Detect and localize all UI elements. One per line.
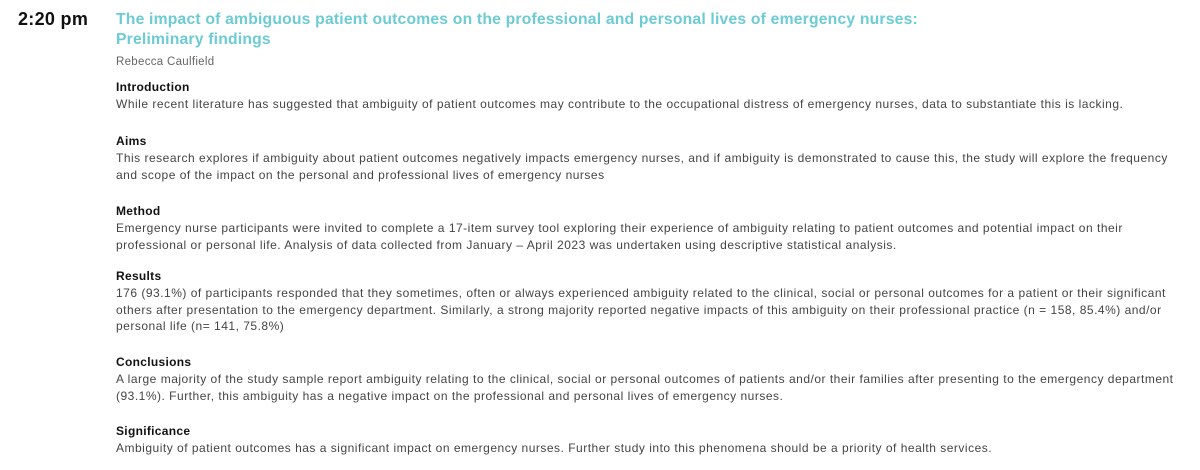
title: Preliminary findings bbox=[116, 31, 271, 48]
section: aims: Aims bbox=[116, 134, 147, 148]
section: conclusions: Conclusions bbox=[116, 355, 191, 369]
section: method: professional or personal life. Analysis of data collected from January – April 2023 was undertaken using descriptive statistical analysis. bbox=[116, 238, 897, 252]
section: method bbox=[116, 204, 1123, 252]
section: conclusions bbox=[116, 355, 1174, 403]
section: aims: and scope of the impact on the personal and professional lives of emergency nurses bbox=[116, 168, 605, 182]
section: introduction: Introduction bbox=[116, 80, 190, 94]
title bbox=[116, 11, 918, 48]
section: results: others after presentation to the emergency department. Similarly, a strong majority reported negative impacts of this ambiguity on their professional practice (n = 158, 85.4%) and/or bbox=[116, 303, 1162, 317]
section: introduction bbox=[116, 80, 1123, 111]
title: The impact of ambiguous patient outcomes on the professional and personal lives of emergency nurses: bbox=[116, 11, 918, 28]
author: Rebecca Caulfield bbox=[116, 56, 214, 68]
section: results: personal life (n= 141, 75.8%) bbox=[116, 319, 284, 333]
section: significance: Significance bbox=[116, 424, 190, 438]
section: conclusions: A large majority of the study sample report ambiguity relating to the clinical, social or personal outcomes of patients and/or their families after presenting to the emergency department bbox=[116, 372, 1174, 386]
section: significance bbox=[116, 424, 992, 455]
time: 2:20 pm bbox=[18, 9, 88, 29]
section: significance: Ambiguity of patient outcomes has a significant impact on emergency nurses. Further study into this phenomena should be a priority of health services. bbox=[116, 441, 992, 455]
section: results: 176 (93.1%) of participants responded that they sometimes, often or always experienced ambiguity related to the clinical, social or personal outcomes for a patient or their significant bbox=[116, 286, 1166, 300]
section: conclusions: (93.1%). Further, this ambiguity has a negative impact on the professional and personal lives of emergency nurses. bbox=[116, 389, 783, 403]
section: method: Emergency nurse participants were invited to complete a 17-item survey tool exploring their experience of ambiguity relating to patient outcomes and potential impact on their bbox=[116, 221, 1123, 235]
section: aims bbox=[116, 134, 1168, 182]
section: introduction: While recent literature has suggested that ambiguity of patient outcomes may contribute to the occupational distress of emergency nurses, data to substantiate this is lacking. bbox=[116, 97, 1123, 111]
section: results bbox=[116, 269, 1166, 333]
section: aims: This research explores if ambiguity about patient outcomes negatively impacts emergency nurses, and if ambiguity is demonstrated to cause this, the study will explore the frequency bbox=[116, 151, 1168, 165]
section: method: Method bbox=[116, 204, 160, 218]
section: results: Results bbox=[116, 269, 161, 283]
